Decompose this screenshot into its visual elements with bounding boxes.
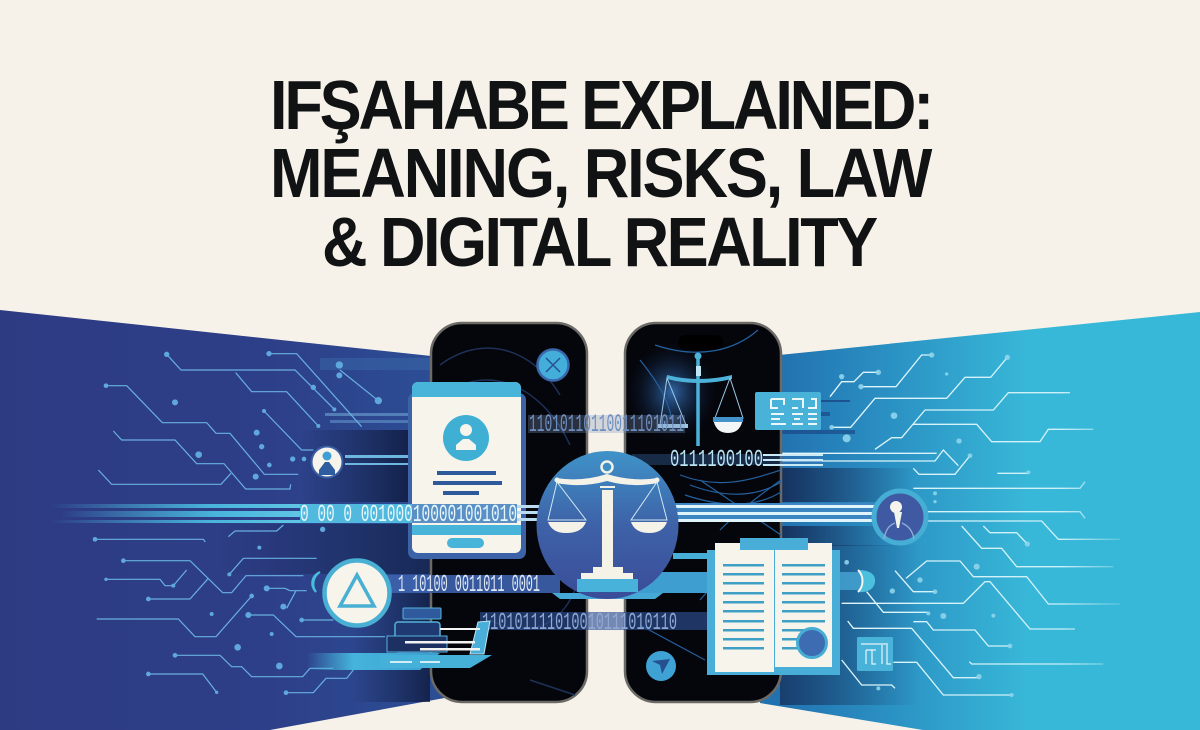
panel: right cyan circuit panel — [760, 312, 1200, 730]
title: & DIGITAL REALITY — [322, 204, 878, 282]
phone: right — [625, 323, 781, 702]
binary strip: main left: 0 00 0 001000100001001010 — [300, 502, 517, 529]
icon: server stack on platform — [307, 608, 492, 670]
icon: compass button — [646, 651, 676, 681]
card: profile screen — [408, 382, 526, 559]
icon: open law book — [707, 538, 840, 675]
avatar — [443, 415, 489, 461]
circuit lines: left — [93, 351, 385, 695]
circuit lines: right — [780, 352, 1120, 697]
binary strip: lower left — [385, 572, 560, 599]
band: connector right of scale — [627, 503, 900, 593]
icon: person badge left — [310, 446, 344, 478]
icon: close button — [538, 350, 568, 380]
binary strip: bottom centre — [480, 610, 708, 637]
binary strip: top centre: 11010110110011101011 — [529, 410, 684, 439]
title: IFŞAHABE EXPLAINED: — [270, 67, 934, 145]
seal — [798, 628, 826, 658]
binary strip: right upper: 0111100100 — [670, 447, 763, 474]
icon: warning triangle badge — [312, 560, 390, 626]
icon: person badge right — [874, 491, 926, 543]
binary strip: main left — [50, 502, 557, 529]
binary strip: top centre — [528, 410, 685, 439]
binary strip: bottom centre: 110101111010010111010110 — [482, 610, 677, 637]
binary strip: lower left: 1 10100 0011011 0001 — [398, 572, 540, 599]
icon: scales of justice on phone — [658, 352, 743, 446]
icon: moon marker right — [840, 570, 875, 592]
title: MEANING, RISKS, LAW — [270, 135, 933, 213]
icon: document data card right — [755, 392, 821, 430]
phone: left — [431, 323, 587, 702]
icon: circuit chip — [857, 637, 893, 671]
panel: left deep-blue circuit panel — [0, 310, 450, 730]
title — [270, 67, 934, 282]
central scales of justice medallion — [536, 451, 678, 599]
